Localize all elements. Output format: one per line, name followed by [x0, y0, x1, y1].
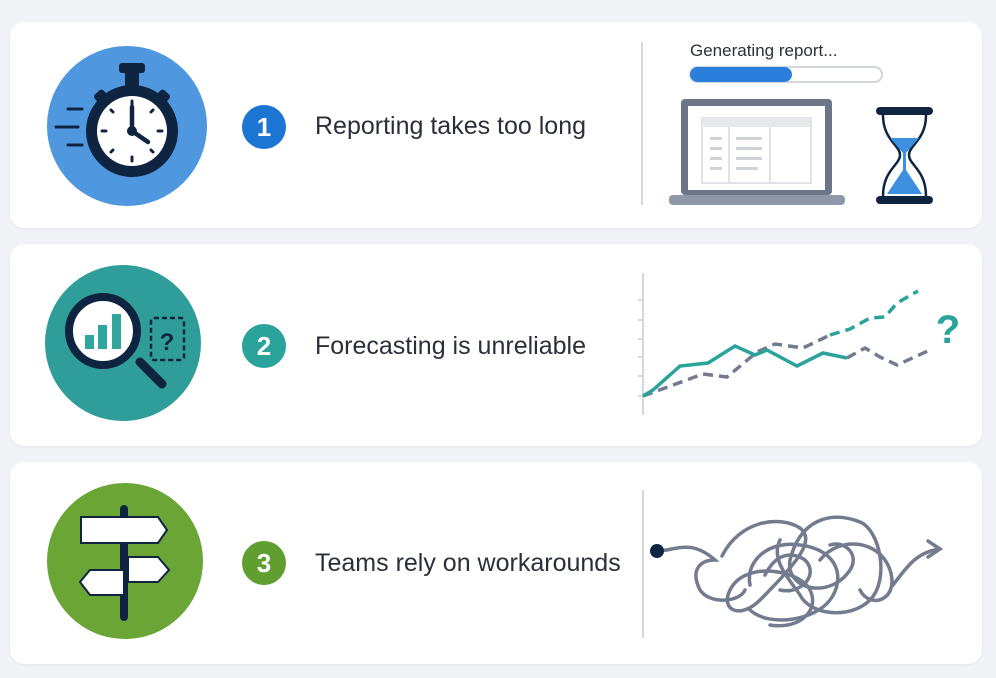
panel: workarounds	[10, 462, 982, 664]
badge 1: 1	[257, 112, 271, 142]
badge 2: 2	[257, 331, 271, 361]
illustration: tangled path	[642, 490, 943, 638]
illustration: generating report	[641, 41, 933, 205]
badge 3: 3	[257, 548, 271, 578]
illustration: generating report: Generating report...	[690, 41, 837, 60]
badge 3	[242, 541, 286, 585]
panel: reporting	[10, 22, 982, 228]
text: forecasting: Forecasting is unreliable	[315, 332, 586, 360]
icon: stopwatch	[47, 46, 207, 206]
text: reporting: Reporting takes too long	[315, 112, 586, 140]
icon: magnifier chart: ?	[160, 329, 174, 356]
icon: magnifier chart	[45, 265, 201, 421]
chart: forecast lines: ?	[936, 308, 960, 352]
badge 1	[242, 105, 286, 149]
badge 2	[242, 324, 286, 368]
icon: signpost	[47, 483, 203, 639]
text: workarounds: Teams rely on workarounds	[315, 549, 621, 577]
chart: forecast lines	[638, 273, 960, 415]
panel: forecasting	[10, 244, 982, 446]
